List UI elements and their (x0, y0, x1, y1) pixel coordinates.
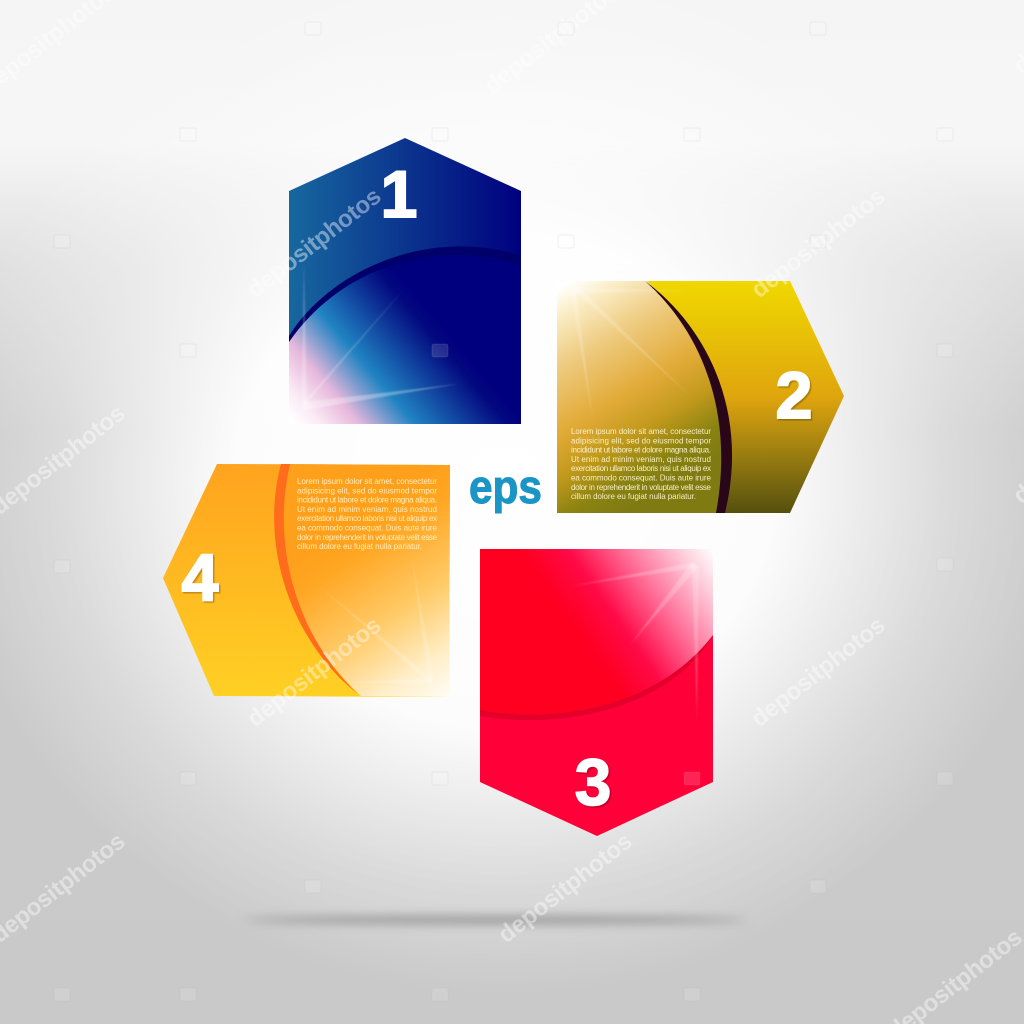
text block: panel 2: cillum dolore eu fugiat nulla pariatur. (571, 492, 696, 501)
text block: panel 2: incididunt ut labore et dolore magna aliqua. (571, 446, 711, 455)
text block: panel 4: Ut enim ad minim veniam, quis nostrud (297, 505, 437, 514)
text block: panel 2 (571, 427, 712, 501)
text block: panel 4: adipisicing elit, sed do eiusmod tempor (297, 486, 437, 495)
watermarks: depositphotos (746, 183, 891, 304)
text block: panel 2: dolor in reprehenderit in voluptate velit esse (571, 483, 712, 492)
watermarks: depositphotos (242, 612, 387, 733)
panel 4: orange (163, 464, 450, 697)
text block: panel 4: cillum dolore eu fugiat nulla pariatur. (297, 542, 422, 551)
text block: panel 4: dolor in reprehenderit in voluptate velit esse (297, 533, 438, 542)
text block: panel 4: exercitation ullamco laboris nisi ut aliquip ex (297, 514, 437, 523)
text block: panel 4: Lorem ipsum dolor sit amet, consectetur (297, 477, 437, 486)
text block: panel 2: adipisicing elit, sed do eiusmod tempor (571, 436, 711, 445)
text block: panel 4: incididunt ut labore et dolore magna aliqua. (297, 496, 437, 505)
text block: panel 4 (297, 477, 438, 551)
text block: panel 2: Ut enim ad minim veniam, quis nostrud (571, 455, 711, 464)
watermarks: depositphotos (493, 828, 638, 949)
number 1: 1 (381, 157, 417, 231)
panel 3: red (480, 549, 713, 836)
number 4: 4 (182, 540, 219, 614)
text block: panel 2: Lorem ipsum dolor sit amet, consectetur (571, 427, 711, 436)
panel 2: yellow (557, 281, 844, 513)
text block: panel 2: ea commodo consequat. Duis aute irure (571, 474, 712, 482)
floor shadow (243, 916, 747, 924)
watermarks: depositphotos (746, 612, 891, 733)
watermarks: depositphotos (242, 183, 387, 304)
text block: panel 4: ea commodo consequat. Duis aute irure (297, 524, 438, 532)
text block: panel 2: exercitation ullamco laboris nisi ut aliquip ex (571, 464, 711, 473)
number 3: 3 (575, 745, 611, 819)
panel 1: blue (289, 138, 521, 424)
number 2: 2 (776, 358, 812, 432)
eps label: eps (469, 460, 542, 513)
